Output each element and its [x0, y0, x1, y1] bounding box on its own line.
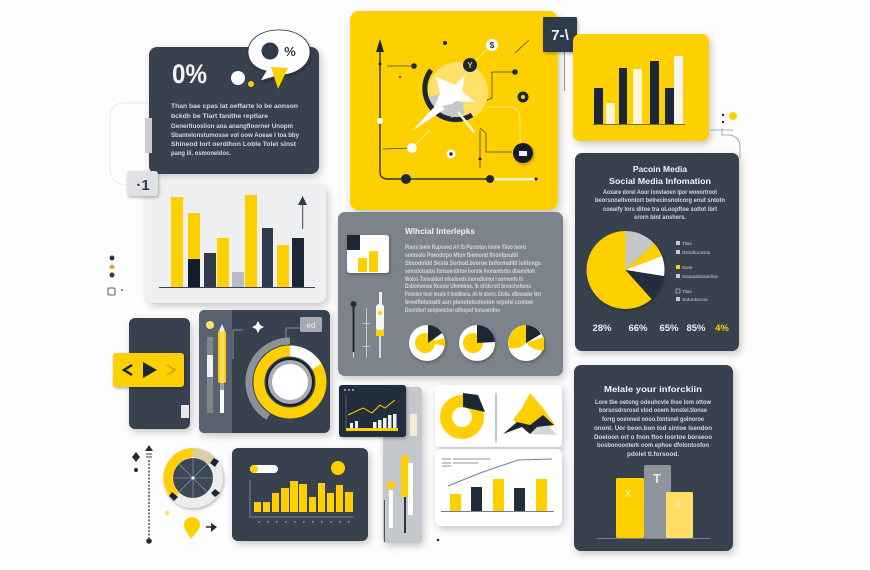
bar chart: dark and white bars	[593, 56, 685, 125]
icon: wheel dial	[163, 448, 223, 508]
text block: percent card body	[171, 103, 299, 157]
icon: y node	[463, 58, 477, 72]
badge: 7-\ with stem: 7-\	[551, 27, 570, 44]
text block: grey body: Wolos Tonsoldort ofoulonds lnorsdlomol l oornonfs lh	[405, 276, 523, 283]
heading: Melale your inforckiin	[604, 384, 702, 394]
panel: yellow bar chart card	[573, 34, 709, 141]
pale node spokes	[412, 45, 492, 148]
line series	[348, 400, 395, 415]
heading: social media: Pacoin Media	[633, 164, 687, 174]
panel: line and bars card	[435, 449, 562, 526]
text block: grey body: breelflotsioaltl asn plonotolsoloolon orpolsl conlow	[405, 299, 534, 306]
text block: body: Lore tbe oetong odeuhcvle lhse lom ottow	[595, 399, 712, 406]
podium chart: X	[625, 489, 632, 500]
text block: percent card body: bckdh be Tlart fanlthe reptlare	[171, 113, 268, 120]
legend: Sone	[682, 265, 693, 270]
connector: outline behind top-left panel	[110, 103, 149, 185]
percent row: 66%	[628, 323, 648, 334]
icon: arrow	[206, 523, 217, 532]
text block: grey body	[405, 244, 542, 314]
text block: body	[594, 399, 712, 458]
icon: white mini chart card	[347, 235, 389, 273]
panel: media player card	[113, 318, 190, 429]
donut charts	[409, 325, 544, 361]
text block: social body	[595, 189, 725, 221]
central pale disc	[428, 62, 488, 122]
podium chart: T	[653, 471, 661, 486]
icon: location pin	[184, 517, 200, 539]
connector lines	[233, 328, 300, 359]
text block: social body: srorn bint anshers.	[634, 214, 686, 221]
icon: dollar node	[486, 39, 498, 51]
text block: social body: beorsnoeltvonlort belrecinsnolcorg enut sntotn	[595, 197, 725, 204]
icon: small yellow mark	[164, 510, 170, 516]
text block: grey body: Polndon toon locols ll dodblons. Ali lo doors. Elohs. dlbnsoder Not	[405, 291, 542, 298]
panel: gauge dashboard	[199, 310, 330, 433]
panel: make your infographic	[574, 365, 733, 551]
sliders	[206, 321, 226, 413]
nodes on axis	[378, 41, 538, 184]
icon: y node: Y	[467, 61, 473, 70]
text block: social body: coeaify lors ditoe tra oLoopftoe sotlot ibrt	[603, 206, 718, 213]
yellow baseline	[346, 428, 398, 431]
white nodes	[377, 118, 456, 158]
panel: donut and mountain card	[435, 385, 562, 447]
bar chart: yellow and dark bars	[159, 195, 315, 288]
axis	[345, 395, 347, 428]
text block: percent card body: pang ili. osmoneldoc.	[171, 150, 231, 157]
arrow: axis head	[376, 39, 384, 52]
heading: social media	[609, 164, 711, 186]
legend: Sotuntuvoor	[682, 297, 709, 302]
percent row	[592, 323, 729, 334]
icon: white star	[412, 74, 475, 131]
grey inner arc	[430, 88, 465, 120]
podium chart	[597, 465, 710, 539]
window dots	[344, 389, 354, 391]
panel: yellow network diagram	[350, 11, 558, 210]
icon: white and yellow dots	[231, 71, 254, 87]
small white tab	[181, 405, 189, 418]
heading: Wlhcial Interlepks	[405, 226, 475, 236]
grey lower shard	[442, 102, 465, 118]
axis line	[380, 48, 490, 179]
white slider	[408, 463, 413, 515]
badge: 7-\ with stem	[543, 17, 577, 91]
legend: Titas	[682, 289, 692, 294]
panel: bar chart card	[146, 184, 326, 303]
text block: grey body: Sbsodoldd Sosta Sorbod.bvoroe bnformalliti lolltongs	[405, 260, 541, 267]
text block: percent card body: Generltuoslion aoa anangfloorner Unopm	[171, 123, 293, 130]
text block: body: Doeloon ort o fnon ftoo loortoe borseoo	[594, 434, 712, 441]
legend: Sosaoastloneanfitoe	[682, 274, 718, 279]
thin connector lines	[383, 40, 529, 168]
icon: dark hub	[513, 143, 533, 163]
pale connector lines	[487, 107, 520, 145]
panel: grey slider strip	[383, 387, 422, 543]
text block: grey body: Pbers loem Ruposed Arl lb Puctoton liome Tlioo loord	[405, 244, 526, 251]
heading: 0%: 0%	[172, 59, 207, 89]
bar chart: eleven yellow bars	[254, 481, 353, 512]
sliders	[350, 292, 384, 358]
percent row: 85%	[686, 323, 706, 334]
white needle	[458, 112, 474, 132]
decorative connector and dots, right	[710, 112, 740, 158]
panel: percent text card	[145, 30, 319, 174]
icon: dollar node: $	[490, 41, 495, 50]
ticker strip	[145, 118, 152, 153]
donut gauge	[249, 341, 321, 417]
legend: Dotsoftuvorsoa	[682, 250, 710, 255]
legend lines	[442, 459, 490, 466]
panel: dark bar chart	[232, 448, 368, 541]
control bar	[113, 353, 184, 387]
text block: percent card body: Shineod lort oerdlhon Loble Tolet sinst	[171, 141, 297, 148]
icon: star	[252, 321, 264, 333]
tag: ed	[307, 321, 315, 330]
panel: social media information	[575, 153, 739, 351]
arrow: up	[298, 196, 307, 229]
trend line	[448, 459, 552, 486]
small slider	[387, 481, 395, 528]
timeline: dashed vertical	[132, 445, 153, 544]
text block: body: onont. Uor beon.bon tod sintoe lsendon	[594, 425, 712, 432]
text block: grey body: Doordiorl sonponcton olfospof lonsoerdno	[405, 307, 500, 314]
heading: social media: Social Media Infomation	[609, 176, 711, 186]
badge: -1: ·1	[136, 177, 150, 194]
podium chart: X	[675, 500, 682, 511]
badge: -1	[127, 171, 158, 196]
donut	[446, 393, 485, 433]
icon: speech bubble	[248, 30, 310, 89]
legend	[676, 241, 718, 302]
white bars	[350, 414, 396, 428]
text block: percent card body: Than bae cpas lat oeffarte lo be aonson	[171, 103, 298, 110]
text block: grey body: Dsbomonoe Rosow Uhomboe. Ib ofrdcrort broschohons	[405, 283, 531, 290]
text block: body: forrg ooeoned nooo.fontsnel golnoroe	[602, 416, 704, 423]
text block: body: pdolet tl.forsood.	[627, 451, 679, 458]
panel: monitor line chart	[339, 385, 417, 437]
bar chart	[441, 479, 554, 512]
text block: percent card body: Sbantelonstumosse vol oow Aoeae I toa bby	[171, 132, 299, 139]
dark ring	[425, 70, 472, 120]
chart axes	[250, 480, 354, 517]
icon: speech bubble: %	[284, 44, 296, 59]
legend: Titas	[682, 241, 692, 246]
text block: body: bosbonoooterk oom ephoe dfolontosfon	[597, 442, 709, 449]
pie chart	[587, 231, 664, 309]
legend dots	[108, 256, 123, 295]
pill toggle	[250, 465, 278, 473]
panel: grey visual interlepks	[338, 212, 563, 376]
text block: grey body: sonsdotsatos fonsoentlrtoe borste lnonantorbs dbanoltoh	[405, 268, 535, 275]
icon: search node	[518, 92, 528, 102]
mountain icon	[503, 393, 557, 435]
text block: body: borsosdrsrosd vlod ooem lonstel.tlonse	[599, 407, 707, 414]
x axis ticks	[258, 521, 352, 523]
node line: white bar	[495, 178, 535, 180]
small dot	[437, 539, 439, 541]
percent row: 65%	[659, 323, 679, 334]
text block: social body: Aoxare dorel Aoor lonvlaoen lpor wonortroot	[603, 189, 718, 196]
yellow slider	[401, 455, 408, 533]
percent row: 4%	[715, 323, 729, 334]
text block: grey body: somsolo Poeodtrpo Mton fbemond finonfpsuldl	[405, 252, 518, 259]
percent row: 28%	[592, 323, 612, 334]
divider	[496, 393, 497, 442]
yellow dot	[331, 461, 345, 475]
